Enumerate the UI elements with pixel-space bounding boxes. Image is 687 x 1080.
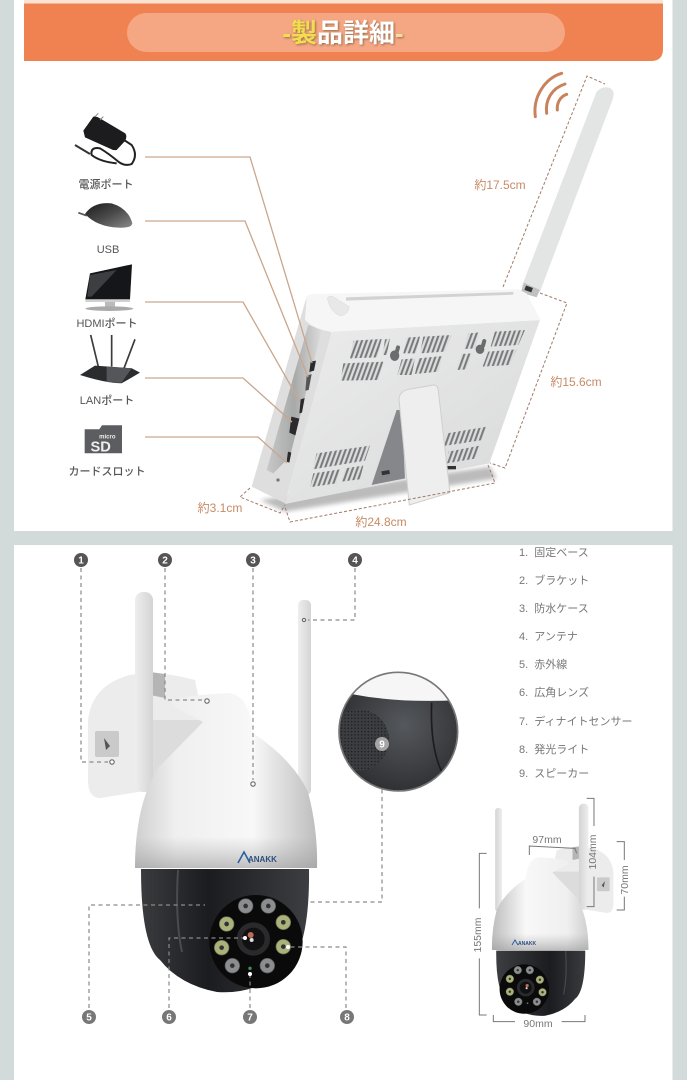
side face [252, 297, 332, 503]
dimension text: 104mm [587, 834, 599, 870]
dimension lines [240, 76, 605, 522]
stand [372, 410, 405, 485]
number badges: 7 [247, 1012, 253, 1024]
lens ring [209, 895, 303, 988]
number badges: 4 [352, 556, 358, 566]
icon: mouse [78, 203, 132, 228]
main camera [88, 592, 317, 992]
dimension labels: 約24.8cm [355, 514, 407, 529]
dimension brackets [479, 798, 624, 1022]
number badges: 1 [78, 556, 84, 566]
label: LAN port: LANポート [80, 394, 134, 407]
label: USB: USB [97, 244, 119, 256]
connector lines [145, 157, 312, 463]
parts list: 3. 防水ケース [519, 601, 589, 615]
leader lines [81, 568, 382, 1008]
parts list: 5. 赤外線 [519, 658, 567, 671]
dimension text: 70mm [619, 865, 631, 895]
dimension labels: 約15.6cm [550, 374, 602, 389]
dimension text: 90mm [523, 1018, 553, 1030]
speaker inset [338, 672, 458, 792]
top face [305, 289, 541, 332]
number badges: 2 [162, 556, 168, 566]
header banner [24, 0, 663, 61]
icon: HDMI monitor [85, 264, 133, 311]
number badges: 3 [250, 556, 256, 566]
parts list [519, 546, 633, 780]
parts list: 4. アンテナ [519, 630, 578, 643]
small logo [512, 940, 536, 947]
parts list: 7. ディナイトセンサー [519, 714, 633, 728]
back face [285, 320, 540, 504]
antennas [135, 592, 153, 792]
number badges [74, 553, 389, 1024]
label: HDMI port: HDMIポート [76, 317, 138, 330]
vents [310, 330, 525, 487]
logo: ANAKK [238, 852, 277, 864]
dimension text: 155mm [472, 917, 484, 953]
logo: ANAKK: ANAKK [248, 855, 277, 864]
dimension labels: 約3.1cm [198, 500, 242, 515]
icon: SD card: micro [99, 435, 116, 441]
number badges: 6 [166, 1012, 172, 1024]
number badges: 9 [379, 740, 385, 750]
parts list: 6. 広角レンズ [519, 685, 589, 699]
dimension text: 97mm [532, 834, 562, 846]
title: -製品詳細- [282, 18, 404, 48]
dimension text [472, 834, 631, 1030]
label: card slot: カードスロット [68, 465, 146, 478]
parts list: 8. 発光ライト [519, 742, 589, 756]
ground shadow [260, 467, 497, 512]
parts list: 2. ブラケット [519, 573, 589, 587]
icon: power adapter [75, 113, 135, 165]
lower band [14, 531, 672, 545]
icon: wifi signal [535, 73, 567, 117]
black lower housing [141, 869, 309, 992]
ports [276, 361, 316, 482]
small camera with dimensions [492, 804, 613, 1016]
parts list: 1. 固定ベース [519, 546, 589, 559]
dimension labels: 約17.5cm [474, 177, 526, 192]
label: power port: 電源ポート [78, 177, 134, 191]
icon: SD card [85, 425, 122, 455]
icon: SD card: SD [90, 439, 111, 455]
parts list: 9. スピーカー [519, 767, 589, 780]
leader end dots [110, 618, 306, 976]
small logo: ANAKK [518, 941, 536, 947]
dimension labels [198, 177, 602, 529]
title pill [127, 13, 565, 52]
icon: router [80, 335, 140, 383]
number badges: 5 [86, 1012, 92, 1024]
wall base [88, 673, 215, 798]
monitor rear view [252, 289, 541, 512]
number badges: 8 [344, 1012, 350, 1024]
dome with neck [135, 693, 317, 868]
monitor antenna [521, 87, 614, 297]
keyholes [390, 339, 487, 361]
